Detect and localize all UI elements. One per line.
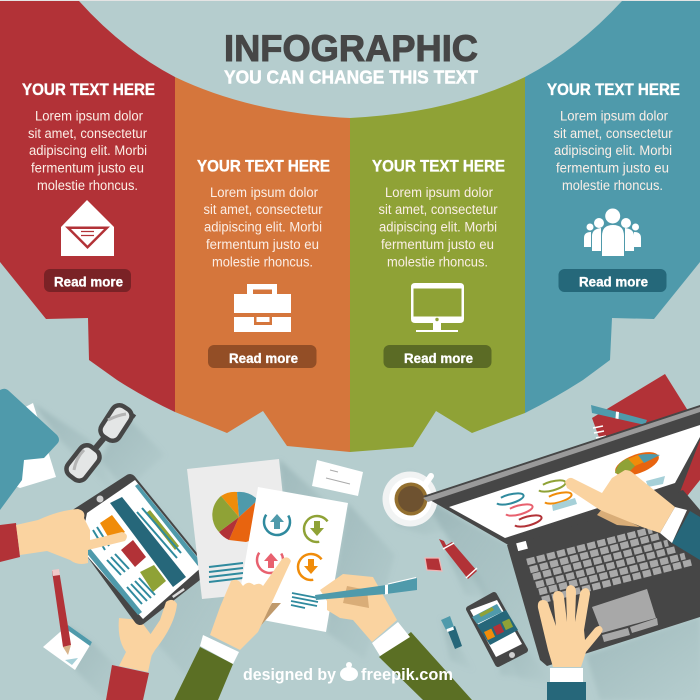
text block: orange column: sit amet, consectetur (204, 202, 323, 217)
text block: teal column: sit amet, consectetur (554, 126, 673, 141)
coffee cup (382, 472, 438, 526)
button: read more red: Read more (54, 274, 123, 290)
text block: orange column: fermentum justo eu (206, 237, 319, 252)
text block: teal column: adipiscing elit. Morbi (554, 143, 672, 158)
tablet (68, 480, 204, 619)
title: INFOGRAPHIC (224, 28, 478, 69)
arrows paper (236, 487, 348, 632)
hand on keyboard (538, 585, 603, 700)
icon: envelope (61, 200, 114, 256)
credit line: designed by (243, 666, 337, 684)
text block: red column: fermentum justo eu (31, 161, 144, 176)
pie chart (212, 492, 265, 542)
button: read more green: Read more (404, 351, 473, 366)
text block: green column: sit amet, consectetur (378, 202, 498, 217)
text block: teal column (554, 108, 673, 193)
text block: teal column: fermentum justo eu (556, 161, 669, 176)
heading: green column: YOUR TEXT HERE (372, 158, 505, 176)
arrow circle orange (296, 552, 326, 582)
panel: green column (350, 77, 525, 452)
panel: orange column (175, 77, 350, 452)
hand pointing at tablet (0, 509, 127, 564)
hand holding tablet (106, 618, 155, 700)
smartphone (469, 595, 525, 664)
hand pointing at paper (174, 557, 291, 700)
panel: red column (0, 1, 175, 412)
arrow circle teal (259, 504, 295, 540)
laptop base (507, 490, 700, 666)
illustration shadows (33, 403, 700, 700)
heading: red column: YOUR TEXT HERE (22, 81, 155, 99)
text block: green column: adipiscing elit. Morbi (379, 220, 497, 234)
text block: red column (28, 108, 148, 193)
hand writing with pen (315, 574, 472, 700)
usb stick (441, 616, 462, 649)
text block: green column: fermentum justo eu (381, 237, 494, 252)
screen charts (495, 447, 665, 529)
text block: green column: molestie rhoncus. (387, 254, 488, 269)
marker and cap (425, 539, 477, 579)
text block: orange column: Lorem ipsum dolor (210, 185, 319, 200)
text block: green column (378, 185, 498, 269)
panel: teal column (525, 1, 700, 413)
text block: red column: adipiscing elit. Morbi (29, 143, 147, 158)
laptop lid (423, 405, 700, 546)
subtitle: YOU CAN CHANGE THIS TEXT (224, 68, 478, 88)
icon: people group (584, 208, 641, 256)
heading: orange column: YOUR TEXT HERE (197, 158, 330, 176)
hand pointing at laptop (565, 470, 700, 560)
touchpad (592, 589, 658, 642)
icon: briefcase (234, 284, 291, 332)
text block: orange column (204, 185, 323, 269)
hand: thumb on tablet (125, 600, 177, 665)
text block: red column: Lorem ipsum dolor (35, 108, 144, 124)
text block: teal column: molestie rhoncus. (562, 178, 663, 193)
button: read more red (44, 269, 131, 292)
icon: monitor (411, 283, 464, 332)
text block: orange column: molestie rhoncus. (212, 254, 313, 269)
pencil on sticky note (43, 569, 92, 670)
text block: red column: molestie rhoncus. (37, 178, 138, 193)
credit line: freepik.com (361, 666, 453, 684)
business card (312, 460, 363, 496)
button: read more teal (558, 269, 666, 292)
red sleeve bottom (106, 665, 149, 700)
laptop screen (449, 425, 700, 538)
arrow circle green (302, 514, 332, 544)
text block: red column: sit amet, consectetur (28, 126, 148, 141)
arrow circle pink (252, 542, 288, 578)
button: read more orange: Read more (229, 351, 298, 366)
folder with paper (0, 389, 59, 510)
heading: teal column: YOUR TEXT HERE (547, 81, 680, 99)
text block: orange column: adipiscing elit. Morbi (204, 220, 322, 234)
icon: freepik logo (340, 662, 358, 681)
chart paper (187, 459, 293, 599)
glasses (63, 402, 135, 484)
button: read more teal: Read more (579, 274, 648, 290)
laptop (423, 405, 700, 666)
button: read more orange (208, 345, 316, 368)
keyboard (527, 530, 693, 600)
button: read more green (384, 345, 492, 368)
text block: green column: Lorem ipsum dolor (385, 185, 494, 200)
credit line (243, 662, 453, 684)
spiral notebook with pen (591, 374, 700, 505)
text block: teal column: Lorem ipsum dolor (560, 108, 669, 124)
